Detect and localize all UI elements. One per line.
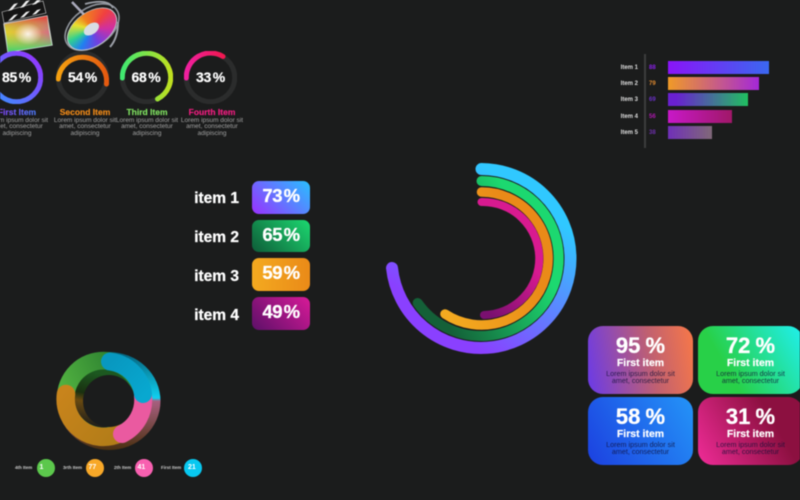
donut: fourth item 33%: 33 % (196, 69, 225, 85)
text: 3rth Item (63, 465, 82, 470)
donut: first item 85%: 85 % (2, 69, 31, 85)
3D donut chart (56, 351, 162, 450)
inner wall (74, 370, 132, 428)
pill: 73%: 73 % (262, 185, 300, 206)
card: 95%: First item (617, 357, 664, 369)
text: first item (0, 107, 48, 137)
card: 95%: 95 % (616, 333, 665, 358)
donut outer wall (58, 352, 160, 450)
donut: second item 54% (55, 51, 110, 104)
text: second item: amet, consectetur (59, 123, 111, 130)
ring: item 4 (482, 202, 539, 315)
card: 72%: Lorem ipsum dolor sit (716, 369, 785, 378)
card: 95%: Lorem ipsum dolor sit (606, 369, 675, 378)
card: 58%: First item (617, 428, 664, 440)
text: third item: adipiscing (133, 130, 161, 137)
text: second item: Lorem ipsum dolor sit (54, 116, 116, 124)
text: 77 (88, 464, 96, 471)
text: third item: Third Item (126, 107, 168, 117)
card: 58%: amet, consectetur (612, 447, 669, 456)
legend: 2th item (114, 458, 154, 478)
card: 72%: 72 % (726, 333, 775, 358)
card: 31%: First item (727, 428, 774, 440)
card: 95%: amet, consectetur (612, 376, 669, 385)
icon: film clapper app (1, 0, 54, 53)
text: third item: Lorem ipsum dolor sit (116, 116, 178, 124)
text: fourth item (180, 107, 244, 137)
text: fourth item: amet, consectetur (186, 123, 238, 130)
pill: 49% (252, 297, 310, 330)
bar row 3 (620, 92, 749, 107)
card: 31% (698, 397, 800, 465)
label: item 1: item 1 (194, 190, 239, 207)
card: 31%: amet, consectetur (722, 447, 779, 456)
text: second item: adipiscing (71, 130, 99, 137)
text: 88 (649, 65, 656, 71)
ring: item 3 (445, 192, 548, 325)
pill: 49%: 49 % (262, 301, 300, 322)
bar row 1 (620, 60, 770, 75)
icon: motion app (64, 0, 120, 52)
text: 1 (40, 464, 43, 471)
pill: 59% (252, 258, 310, 290)
text: second item (54, 107, 116, 137)
text: 56 (649, 114, 656, 120)
donut hole (83, 375, 135, 427)
text: Item 2 (621, 81, 638, 87)
radial bar chart (385, 162, 578, 355)
pill: 59%: 59 % (262, 262, 300, 283)
text: first item: adipiscing (3, 130, 31, 137)
ring: item 1 (392, 169, 570, 348)
card: 31%: 31 % (726, 404, 775, 429)
legend: first item (160, 458, 203, 478)
text: 41 (138, 464, 145, 471)
card: 95% (588, 326, 693, 394)
text: 79 (649, 81, 656, 87)
text: Item 4 (621, 114, 638, 120)
bar row 4 (620, 109, 733, 124)
donut: second item 54%: 54 % (68, 69, 97, 85)
donut: third item 68% (119, 50, 174, 104)
text: fourth item: Fourth Item (189, 107, 235, 117)
card: 72% (698, 326, 800, 394)
text: fourth item: Lorem ipsum dolor sit (181, 116, 243, 124)
ring: item 2 (418, 181, 559, 336)
pill: 65%: 65 % (262, 224, 300, 244)
text: fourth item: adipiscing (198, 130, 226, 137)
bar row 5 (620, 125, 712, 140)
legend: 3rth item (62, 458, 105, 478)
label: item 3: item 3 (194, 268, 239, 285)
text: First Item (161, 465, 181, 470)
donut: third item 68%: 68 % (131, 69, 161, 85)
legend: 4th item (14, 458, 56, 478)
card: 58%: 58 % (616, 404, 665, 429)
segment: cyan (110, 362, 143, 394)
segment: pink (122, 396, 143, 434)
text: 21 (188, 464, 196, 471)
text: Item 3 (621, 97, 638, 103)
text: 4th Item (15, 465, 32, 470)
card: 72%: First item (727, 357, 774, 369)
pill: 65% (252, 220, 310, 252)
card: 58%: Lorem ipsum dolor sit (606, 440, 675, 449)
pill: 73% (252, 181, 310, 214)
segment: orange (66, 394, 120, 437)
text: Item 5 (621, 130, 638, 136)
segment: green (66, 361, 141, 436)
card: 31%: Lorem ipsum dolor sit (716, 440, 785, 449)
card: 58% (588, 397, 693, 465)
card: 72%: amet, consectetur (722, 376, 779, 385)
text: 2th Item (114, 465, 131, 470)
text: 38 (649, 130, 656, 136)
label: item 4: item 4 (194, 307, 239, 324)
text: 69 (649, 97, 656, 103)
text: Item 1 (621, 65, 638, 71)
bar row 2 (620, 76, 760, 91)
text: second item: Second Item (60, 107, 110, 117)
text: third item: amet, consectetur (121, 123, 173, 130)
donut: fourth item 33% (183, 50, 237, 104)
label: item 2: item 2 (194, 229, 239, 246)
bar chart axis (644, 54, 646, 148)
text: third item (116, 107, 178, 137)
donut: first item 85% (0, 50, 44, 105)
